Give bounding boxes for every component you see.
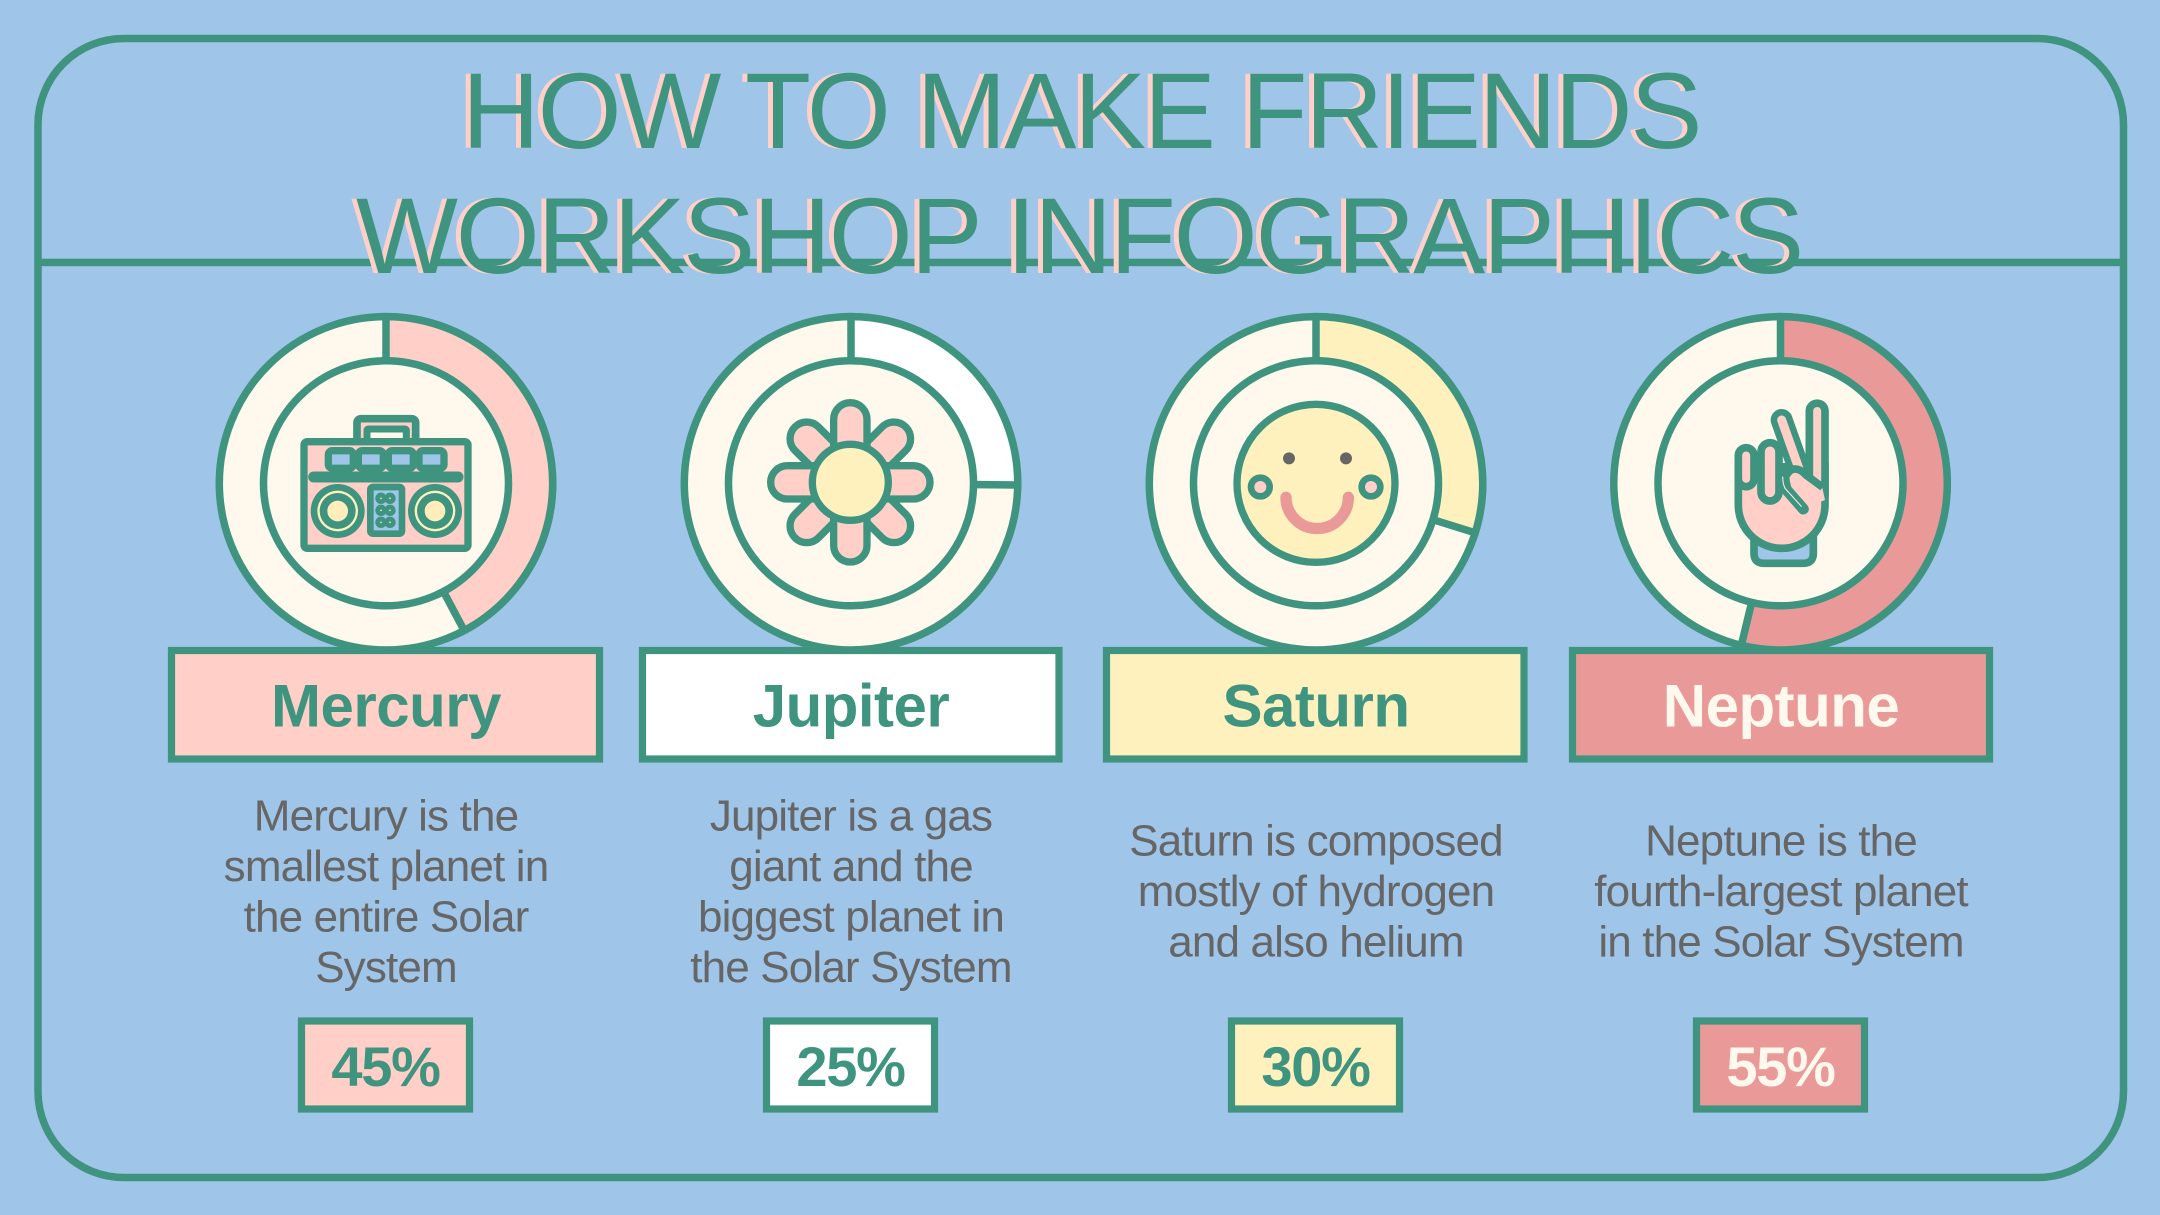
icon: boombox xyxy=(304,419,468,548)
percentage: 25%: 25% xyxy=(796,1035,905,1098)
description: Saturn: Saturn is composed xyxy=(1129,816,1503,866)
description: Mercury: the entire Solar xyxy=(244,892,529,942)
description: Mercury: Mercury is the xyxy=(254,792,518,840)
description: Saturn: and also helium xyxy=(1168,918,1464,966)
header divider line xyxy=(38,259,2124,266)
panel: Mercury xyxy=(172,317,600,1109)
description: Saturn: mostly of hydrogen xyxy=(1138,867,1494,916)
percentage: 45% xyxy=(302,1021,470,1109)
icon: smiley face xyxy=(1237,404,1395,562)
description: Jupiter: Jupiter is a gas xyxy=(710,792,992,840)
title: HOW TO MAKE FRIENDS xyxy=(462,50,1700,171)
panel: Jupiter xyxy=(642,317,1059,1109)
panel: Saturn xyxy=(1106,317,1524,1109)
panel: Neptune xyxy=(1572,317,1990,1109)
percentage: 45%: 45% xyxy=(331,1035,440,1098)
title: WORKSHOP INFOGRAPHICS xyxy=(356,175,1802,296)
percentage: 55% xyxy=(1696,1021,1864,1109)
name label: Jupiter xyxy=(642,650,1059,759)
donut chart: Saturn 30% xyxy=(1149,317,1483,650)
icon: peace sign hand xyxy=(1738,403,1825,563)
name label: Neptune xyxy=(1572,650,1990,759)
description: Mercury: System xyxy=(315,943,457,992)
percentage: 30%: 30% xyxy=(1261,1035,1370,1098)
name label: Neptune: Neptune xyxy=(1663,672,1899,740)
name label: Saturn: Saturn xyxy=(1222,672,1410,740)
description: Neptune: in the Solar System xyxy=(1598,918,1964,966)
description: Neptune: fourth-largest planet xyxy=(1594,867,1968,916)
percentage: 30% xyxy=(1232,1021,1400,1109)
percentage: 25% xyxy=(766,1021,934,1109)
description: Jupiter: the Solar System xyxy=(690,943,1012,992)
name label: Jupiter: Jupiter xyxy=(753,672,949,740)
description: Mercury: smallest planet in xyxy=(224,842,548,891)
donut chart: Neptune 55% xyxy=(1614,317,1947,650)
percentage: 55%: 55% xyxy=(1726,1035,1835,1098)
title xyxy=(356,50,1802,296)
donut chart: Mercury 45% xyxy=(219,317,553,650)
description: Jupiter: biggest planet in xyxy=(698,892,1004,942)
donut chart: Jupiter 25% xyxy=(684,317,1018,650)
name label: Mercury xyxy=(172,650,600,759)
name label: Saturn xyxy=(1106,650,1524,759)
icon: flower xyxy=(771,403,930,562)
name label: Mercury: Mercury xyxy=(271,672,502,740)
description: Neptune: Neptune is the xyxy=(1645,816,1917,866)
description: Jupiter: giant and the xyxy=(729,842,973,891)
